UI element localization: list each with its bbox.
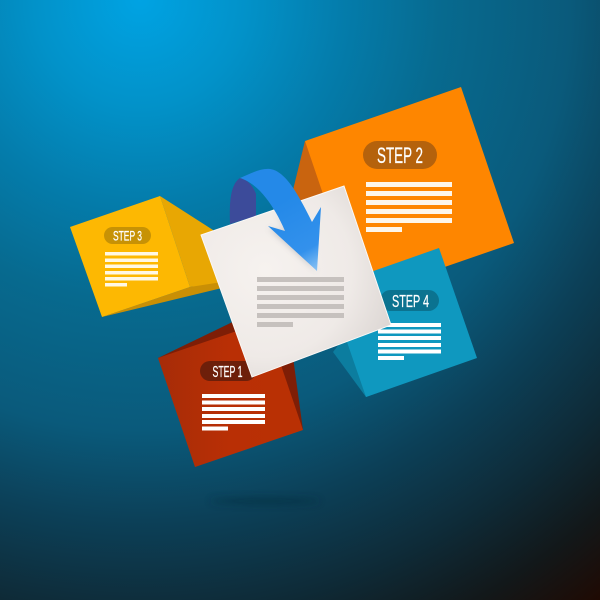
- panel: step 2 orange: [293, 87, 514, 297]
- arrow back band: [230, 178, 256, 224]
- yellow side fold: [160, 196, 222, 287]
- panel: white document: [201, 186, 391, 377]
- panel: step 1 red: [158, 316, 303, 467]
- panel: step 4 teal: [328, 248, 477, 397]
- orange side fold: [293, 141, 340, 260]
- paper sheet: [201, 186, 391, 377]
- yellow front face: [70, 196, 190, 317]
- step 1 badge: [200, 361, 256, 381]
- teal side fold: [333, 330, 380, 397]
- step 1 badge: STEP 1: [212, 364, 242, 381]
- orange front face: [305, 87, 514, 297]
- icon: blue arrow: [240, 169, 321, 271]
- step 4 badge: [380, 290, 439, 311]
- step 3 text lines: [105, 252, 158, 286]
- step 2 badge: [363, 141, 437, 169]
- step 4 text lines: [378, 323, 441, 360]
- step 2 badge: STEP 2: [377, 143, 423, 168]
- arrow shadow: [268, 212, 317, 272]
- step 3 badge: STEP 3: [113, 228, 142, 244]
- red front face: [158, 321, 303, 467]
- panel: step 3 yellow: [70, 196, 222, 317]
- step 2 text lines: [366, 182, 452, 232]
- yellow lower fold: [102, 282, 222, 317]
- step 3 badge: [104, 227, 151, 244]
- red back fold: [158, 316, 303, 430]
- document text lines: [257, 277, 344, 327]
- step 1 text lines: [202, 394, 265, 430]
- step 4 badge: STEP 4: [392, 291, 429, 311]
- teal front face: [328, 248, 477, 397]
- floor shadow: [210, 498, 320, 504]
